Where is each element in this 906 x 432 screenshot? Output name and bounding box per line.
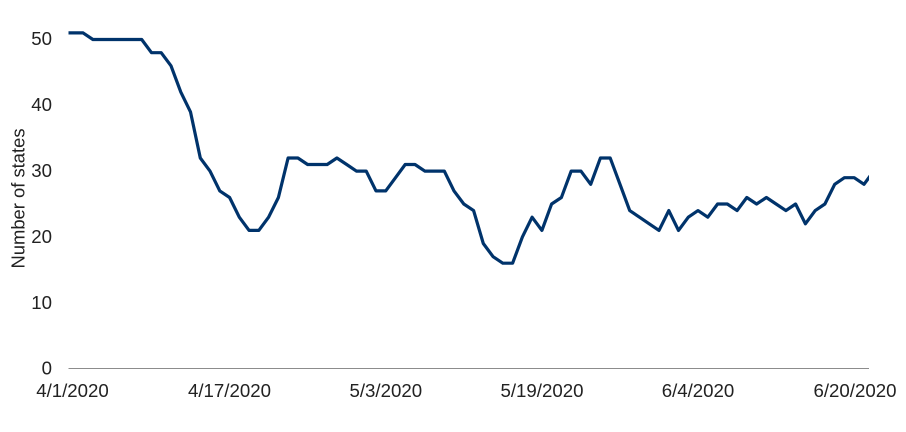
x-axis date labels: 5/19/2020 (500, 380, 584, 401)
x-axis date labels: 5/3/2020 (349, 380, 422, 401)
y-axis tick labels: 50 (31, 28, 52, 49)
x-axis date labels: 4/1/2020 (36, 380, 109, 401)
y-axis tick labels: 0 (42, 358, 52, 378)
x-axis date labels (36, 380, 896, 401)
x-axis date labels: 6/20/2020 (814, 380, 896, 401)
y-axis title: Number of states (7, 128, 28, 269)
y-axis tick labels: 20 (31, 226, 52, 247)
y-axis tick labels: 10 (31, 292, 52, 313)
y-axis tick labels (31, 28, 52, 378)
y-axis tick labels: 40 (31, 94, 52, 115)
x-axis date labels: 4/17/2020 (188, 380, 271, 401)
y-axis tick labels: 30 (31, 160, 52, 181)
data line (64, 33, 874, 263)
x-axis date labels: 6/4/2020 (662, 380, 734, 401)
x-axis line (68, 368, 869, 370)
